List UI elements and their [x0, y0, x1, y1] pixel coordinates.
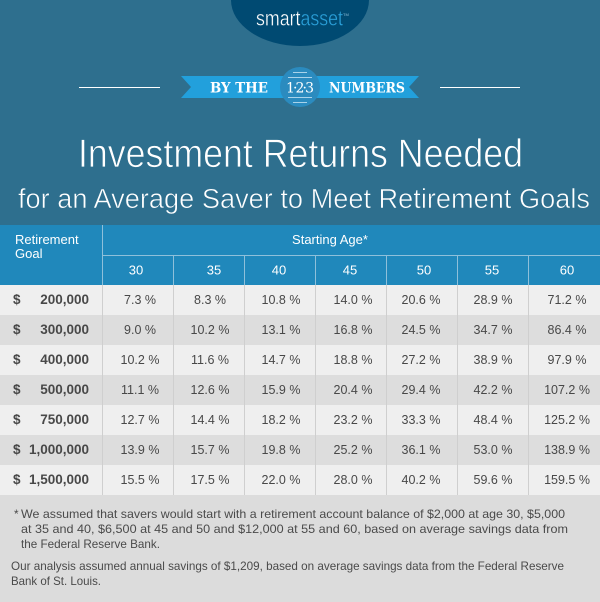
logo badge: TM — [343, 12, 349, 17]
footnote: annual savings: Our analysis assumed annual savings of $1,209, based on average savings data from the Federal Reserve — [11, 559, 564, 573]
by the numbers ribbon: BY THE — [210, 80, 268, 96]
row: 1,000,000: 19.8 % — [262, 443, 300, 457]
row: 300,000: 24.5 % — [402, 323, 440, 337]
row: 300,000: 13.1 % — [262, 323, 300, 337]
table header: 40 — [272, 262, 286, 278]
footnote: starting balances: * — [14, 507, 19, 521]
row: 400,000: 400,000 — [40, 352, 89, 367]
row: 750,000 — [13, 412, 590, 427]
row: 1,500,000: 15.5 % — [121, 473, 159, 487]
row: 500,000 — [13, 382, 590, 397]
footnote: starting balances: We assumed that savers would start with a retirement account balance of $2,000 at age 30, $5,000 — [21, 507, 565, 521]
row: 750,000: 14.4 % — [191, 413, 229, 427]
row: 400,000: 11.6 % — [191, 353, 229, 367]
row: 750,000: 12.7 % — [121, 413, 159, 427]
row: 500,000: 15.9 % — [262, 383, 300, 397]
row: 1,500,000: 159.5 % — [544, 473, 590, 487]
row: 1,000,000 — [13, 442, 590, 457]
table header: 50 — [417, 262, 431, 278]
subtitle: for an Average Saver to Meet Retirement Goals — [18, 183, 590, 214]
table header: Starting Age* — [292, 232, 368, 247]
row: 1,500,000: 1,500,000 — [29, 472, 89, 487]
header background — [0, 0, 600, 225]
row: 300,000: 300,000 — [40, 322, 89, 337]
row: 1,500,000: 40.2 % — [402, 473, 440, 487]
row: 750,000: $ — [13, 412, 21, 427]
row: 200,000: 10.8 % — [262, 293, 300, 307]
row: 300,000: 9.0 % — [124, 323, 156, 337]
row: 1,500,000: 22.0 % — [262, 473, 300, 487]
row: 750,000: 23.2 % — [334, 413, 372, 427]
by the numbers ribbon — [181, 67, 419, 107]
row: 200,000: 8.3 % — [194, 293, 226, 307]
row: 200,000: 71.2 % — [548, 293, 586, 307]
row: 1,000,000: 13.9 % — [121, 443, 159, 457]
row: 400,000: $ — [13, 352, 21, 367]
table header: 30 — [129, 262, 143, 278]
row: 200,000: $ — [13, 292, 21, 307]
row: 500,000: $ — [13, 382, 21, 397]
row: 1,000,000: 36.1 % — [402, 443, 440, 457]
by the numbers ribbon: NUMBERS — [329, 80, 405, 96]
row: 400,000: 38.9 % — [474, 353, 512, 367]
row: 400,000 — [13, 352, 586, 367]
table header: 60 — [560, 262, 574, 278]
row: 400,000: 10.2 % — [121, 353, 159, 367]
row: 300,000: 16.8 % — [334, 323, 372, 337]
row: 1,000,000: 15.7 % — [191, 443, 229, 457]
title: Investment Returns Needed — [78, 132, 523, 176]
row: 1,000,000: $ — [13, 442, 21, 457]
row: 750,000: 48.4 % — [474, 413, 512, 427]
table header: Retirement — [15, 232, 79, 247]
row: 300,000: 34.7 % — [474, 323, 512, 337]
by the numbers ribbon: 1·2·3 — [286, 80, 314, 96]
row: 500,000: 500,000 — [40, 382, 89, 397]
row: 400,000: 97.9 % — [548, 353, 586, 367]
table header: 45 — [343, 262, 357, 278]
table rows — [0, 285, 600, 495]
row: 200,000: 7.3 % — [124, 293, 156, 307]
row: 500,000: 20.4 % — [334, 383, 372, 397]
row: 1,000,000: 138.9 % — [544, 443, 590, 457]
row: 1,000,000: 53.0 % — [474, 443, 512, 457]
logo badge — [231, 0, 369, 46]
row: 200,000: 14.0 % — [334, 293, 372, 307]
row: 1,500,000: 17.5 % — [191, 473, 229, 487]
row: 1,500,000: 28.0 % — [334, 473, 372, 487]
row: 200,000: 20.6 % — [402, 293, 440, 307]
row: 300,000: $ — [13, 322, 21, 337]
table header: 35 — [207, 262, 221, 278]
footnote: starting balances: the Federal Reserve Bank. — [21, 537, 160, 551]
row: 1,500,000: $ — [13, 472, 21, 487]
row: 300,000: 10.2 % — [191, 323, 229, 337]
row: 500,000: 42.2 % — [474, 383, 512, 397]
row: 200,000: 28.9 % — [474, 293, 512, 307]
row: 500,000: 11.1 % — [121, 383, 159, 397]
row: 1,500,000 — [13, 472, 590, 487]
right rule — [440, 87, 520, 88]
row: 300,000 — [13, 322, 586, 337]
row: 1,000,000: 1,000,000 — [29, 442, 89, 457]
table header: Goal — [15, 246, 43, 261]
row: 400,000: 14.7 % — [262, 353, 300, 367]
row: 200,000: 200,000 — [40, 292, 89, 307]
footnote background — [0, 495, 600, 602]
row: 750,000: 18.2 % — [262, 413, 300, 427]
row: 500,000: 29.4 % — [402, 383, 440, 397]
table header: 55 — [485, 262, 499, 278]
row: 750,000: 33.3 % — [402, 413, 440, 427]
row: 400,000: 18.8 % — [334, 353, 372, 367]
footnote: annual savings: Bank of St. Louis. — [11, 574, 101, 588]
row: 750,000: 125.2 % — [544, 413, 590, 427]
footnote: annual savings — [11, 559, 564, 588]
row: 400,000: 27.2 % — [402, 353, 440, 367]
row: 300,000: 86.4 % — [548, 323, 586, 337]
footnote: starting balances: at 35 and 40, $6,500 at 45 and 50 and $12,000 at 55 and 60, based on average savings data from — [21, 522, 568, 536]
footnote: starting balances — [14, 507, 568, 551]
row: 1,500,000: 59.6 % — [474, 473, 512, 487]
row: 500,000: 107.2 % — [544, 383, 590, 397]
row: 500,000: 12.6 % — [191, 383, 229, 397]
logo badge: smartasset — [256, 8, 343, 30]
table header — [0, 225, 600, 285]
row: 200,000 — [13, 292, 586, 307]
left rule — [79, 87, 160, 88]
row: 750,000: 750,000 — [40, 412, 89, 427]
row: 1,000,000: 25.2 % — [334, 443, 372, 457]
